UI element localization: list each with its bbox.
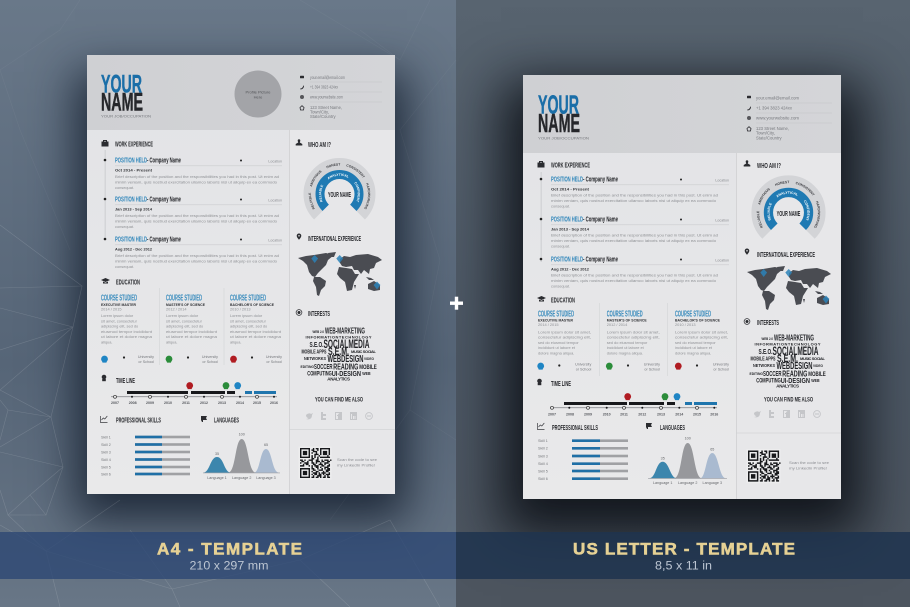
word cloud: WEB: [811, 378, 820, 383]
word cloud: NETWORKS: [753, 363, 775, 368]
section: time line: [102, 375, 278, 405]
course 1: Lorem ipsum dolor sit amet,: [538, 329, 591, 334]
course 1: eiusmod tempor incididunt: [101, 329, 153, 334]
section: time line: 2015: [253, 401, 261, 405]
section: time line: 2016: [270, 401, 278, 405]
header: name: [538, 90, 589, 140]
course 2: University: [202, 355, 218, 359]
panel: US letter resume page: [523, 75, 841, 499]
course 3: 2010 / 2013: [675, 322, 696, 327]
course 2: [606, 309, 660, 372]
course 2: adipiscing elit, sed do: [166, 324, 203, 329]
job entry 2: consequat.: [551, 244, 570, 248]
section: time line: 2011: [182, 401, 190, 405]
course 1: aliqua.: [101, 340, 112, 344]
scan caption: [789, 460, 829, 470]
social links: [306, 396, 372, 420]
job entry 1: - Company Name: [583, 174, 618, 184]
course 3: sit amet, consectetur: [230, 318, 267, 323]
scan caption: my LinkedIn Profile!: [337, 462, 375, 468]
scan caption: [337, 457, 377, 468]
job entry 1: POSITION HELD: [115, 156, 147, 164]
word cloud: UI-DESIGN: [781, 376, 810, 385]
job entry 2: [115, 194, 282, 229]
word cloud: COMPUTING: [756, 378, 781, 384]
job entry 3: consequat.: [551, 284, 570, 288]
word cloud: S.E.O.: [758, 349, 773, 356]
course 1: dolore magna aliqua.: [538, 350, 574, 355]
social links: [754, 396, 820, 418]
course 2: [166, 294, 218, 364]
course 1: Lorem ipsum dolor: [101, 313, 134, 318]
chart: professional skills: Skill 2: [538, 447, 548, 451]
job entry 3: minim veniam, quis nostrud exercitation ullamco laboris nisi ut aliquip ex ea commodo: [115, 258, 277, 264]
contact details: [747, 96, 832, 140]
arc chart: personality: RELIABLE ANALYTICAL CONFIDENT: [318, 173, 360, 202]
job entry 1: POSITION HELD: [551, 174, 583, 184]
word cloud: MOBILE APPS: [302, 350, 327, 356]
chart: languages: 100: [685, 436, 691, 440]
course 3: [230, 294, 282, 364]
section: interests: INTERESTS: [757, 318, 779, 327]
job entry 2: minim veniam, quis nostrud exercitation ullamco laboris nisi ut aliquip ex ea commodo: [551, 238, 716, 243]
job entry 2: [551, 214, 729, 248]
course 2: University: [644, 362, 660, 366]
chart: professional skills: [538, 423, 628, 481]
chart: professional skills: Skill 6: [101, 472, 111, 476]
course 2: aliqua.: [166, 340, 177, 344]
section: time line: 2013: [657, 412, 665, 416]
course 2: 2012 / 2014: [166, 306, 187, 312]
word cloud: NETWORKS: [304, 356, 326, 361]
course 2: sit amet, consectetur: [166, 318, 203, 323]
chart: professional skills: PROFESSIONAL SKILLS: [116, 415, 161, 424]
word cloud: INFORMATIONTECHNOLOGY: [306, 334, 372, 340]
section: interests: INTERESTS: [308, 309, 330, 318]
chart: languages: [646, 423, 727, 485]
section: time line: 2008: [566, 412, 574, 416]
header: name: NAME: [101, 88, 143, 116]
course 1: or School: [138, 360, 154, 364]
course 2: dolore magna aliqua.: [607, 350, 643, 355]
job entry 1: Oct 2014 - Present: [115, 168, 153, 172]
job entry 1: consequat.: [551, 204, 570, 208]
section: time line: 2014: [236, 401, 244, 405]
course 3: consectetur adipiscing elit,: [675, 335, 728, 340]
word cloud: WEB-MARKETING: [325, 326, 365, 336]
job entry 3: - Company Name: [583, 254, 618, 264]
job entry 1: Oct 2014 - Present: [551, 188, 590, 192]
word cloud: S.E.M.: [328, 346, 349, 358]
chart: languages: Language 1: [653, 481, 672, 485]
course 3: ut labore et dolore magna: [230, 334, 282, 339]
section: time line: 2009: [146, 401, 154, 405]
course 1: University: [138, 355, 154, 359]
section: time line: 2010: [603, 412, 611, 416]
plus sign: [450, 297, 463, 310]
word cloud: VIDEO: [813, 363, 823, 368]
section: who am I: WHO AM I?: [757, 161, 781, 170]
course 2: or School: [644, 367, 660, 371]
job entry 2: consequat.: [115, 224, 134, 229]
course 1: incididunt ut labore et: [538, 345, 576, 350]
section: work experience: WORK EXPERIENCE: [115, 139, 153, 148]
section: education: EDUCATION: [551, 295, 575, 304]
profile picture: Profile Picture: [246, 90, 271, 94]
job entry 1: consequat.: [115, 185, 134, 190]
word cloud: MOBILE APPS: [750, 356, 776, 362]
arc chart: personality: RELIABLE AMBITIOUS HONEST CONSISTENT HARDWORKING: [308, 163, 370, 210]
section: time line: 2015: [693, 412, 701, 416]
word cloud: VIDEO: [364, 356, 374, 361]
job entry 2: - Company Name: [147, 194, 181, 204]
job entry 3: [551, 254, 729, 288]
section: work experience: WORK EXPERIENCE: [551, 160, 590, 169]
job entry 2: Jan 2013 - Sep 2014: [115, 208, 153, 212]
chart: professional skills: Skill 1: [538, 439, 548, 443]
word cloud: ANALYTICS: [327, 376, 350, 382]
job entry 3: Aug 2012 - Dec 2012: [551, 268, 589, 272]
job entry 2: POSITION HELD: [551, 214, 583, 224]
word cloud: EDITING: [300, 364, 314, 369]
section: time line: 2012: [638, 412, 646, 416]
contact details: Town/City,: [756, 130, 775, 136]
job entry 2: - Company Name: [583, 214, 618, 224]
course 2: COURSE STUDIED: [607, 309, 643, 318]
course 1: [537, 309, 591, 372]
header: name: YOUR JOB/OCCUPATION: [538, 135, 589, 140]
chart: languages: 100: [239, 432, 245, 436]
course 3: Lorem ipsum dolor sit amet,: [675, 329, 728, 334]
chart: languages: 35: [215, 452, 219, 456]
course 2: or School: [202, 360, 218, 364]
section: interests: [296, 309, 377, 382]
section: international experience: INTERNATIONAL EXPERIENCE: [308, 234, 361, 243]
word cloud: [300, 326, 377, 382]
job entry 3: Location: [715, 258, 729, 262]
contact details: 123 Street Name,: [756, 126, 789, 131]
word cloud: WEB: [362, 371, 371, 376]
chart: languages: Language 1: [207, 476, 227, 480]
caption band: A4: [0, 532, 456, 579]
contact details: [300, 75, 382, 119]
job entry 1: minim veniam, quis nostrud exercitation ullamco laboris nisi ut aliquip ex ea commodo: [551, 198, 716, 203]
section: time line: 2008: [129, 401, 137, 405]
header: name: YOUR: [538, 90, 579, 120]
word cloud: READING: [782, 368, 808, 378]
word cloud: SOCCER: [314, 364, 332, 371]
job entry 2: minim veniam, quis nostrud exercitation ullamco laboris nisi ut aliquip ex ea commodo: [115, 218, 277, 224]
social links: YOU CAN FIND ME ALSO: [315, 396, 363, 404]
job entry 3: minim veniam, quis nostrud exercitation ullamco laboris nisi ut aliquip ex ea commodo: [551, 278, 716, 283]
course 2: sed do eiusmod tempor: [607, 340, 648, 345]
word cloud: EDITING: [750, 371, 763, 376]
contact details: 123 Street Name,: [310, 105, 342, 110]
chart: languages: 65: [710, 448, 714, 452]
word cloud: WEB 2.0: [762, 336, 774, 341]
course 1: COURSE STUDIED: [538, 309, 574, 318]
header: name: [101, 70, 151, 118]
caption band: US letter: US LETTER - TEMPLATE: [573, 540, 795, 558]
chart: professional skills: Skill 5: [538, 469, 548, 473]
caption band: US letter: [456, 532, 910, 579]
section: time line: 2007: [111, 401, 119, 405]
arc chart: personality: RELIABLE AMBITIOUS HONEST CONSISTENT HARDWORKING: [756, 180, 820, 228]
course 1: EXECUTIVE MASTER: [101, 303, 136, 307]
course 1: or School: [576, 367, 591, 371]
section: time line: 2007: [548, 412, 556, 416]
course 1: sed do eiusmod tempor: [538, 340, 579, 345]
word cloud: SOCIALMEDIA: [324, 337, 370, 351]
section: international experience: [297, 234, 382, 296]
chart: languages: 35: [661, 456, 665, 460]
section: time line: 2012: [200, 401, 208, 405]
word cloud: MUSIC SOCIAL: [351, 349, 377, 354]
caption band: US letter: 8,5 x 11 in: [655, 560, 712, 572]
word cloud: WEBDESIGN: [328, 354, 364, 365]
contact details: State/Country: [756, 136, 783, 140]
course 1: sit amet, consectetur: [101, 318, 138, 323]
job entry 2: Brief description of the position and the responsibilities you had in this post. Ut enim ad: [551, 232, 718, 238]
contact details: +1 394 3823 424xx: [756, 106, 793, 110]
arc chart: personality: [752, 176, 826, 238]
word cloud: MOBILE: [359, 364, 377, 371]
contact details: your.email@email.com: [756, 96, 800, 100]
course 3: BACHELOR'S OF SCIENCE: [675, 319, 720, 323]
QR code: [299, 447, 331, 479]
word cloud: WEBDESIGN: [776, 361, 812, 372]
course 2: eiusmod tempor incididunt: [166, 329, 218, 334]
course 1: 2014 / 2015: [101, 306, 122, 312]
profile picture: Here: [254, 94, 263, 100]
caption band: A4: A4 - TEMPLATE: [157, 540, 302, 558]
course 3: Lorem ipsum dolor: [230, 313, 263, 318]
job entry 2: Location: [715, 218, 729, 222]
arc chart: personality: RELIABLE ANALYTICAL CONFIDENT: [767, 191, 810, 221]
job entry 1: [115, 156, 282, 190]
chart: professional skills: Skill 1: [101, 435, 111, 439]
job entry 1: Brief description of the position and the responsibilities you had in this post. Ut enim ad: [551, 192, 718, 198]
section: international experience: INTERNATIONAL EXPERIENCE: [757, 250, 815, 259]
course 3: University: [266, 355, 282, 359]
course 3: University: [713, 362, 729, 366]
panel: A4 resume page: [87, 55, 395, 494]
course 1: EXECUTIVE MASTER: [538, 319, 573, 323]
chart: professional skills: Skill 4: [538, 462, 548, 466]
course 3: adipiscing elit, sed do: [230, 324, 267, 329]
chart: languages: LANGUAGES: [214, 415, 239, 424]
course 2: 2012 / 2014: [607, 322, 628, 327]
job entry 1: - Company Name: [147, 156, 181, 164]
course 2: consectetur adipiscing elit,: [607, 335, 660, 340]
chart: languages: Language 3: [703, 481, 722, 485]
chart: professional skills: Skill 2: [101, 443, 111, 447]
job entry 3: Aug 2012 - Dec 2012: [115, 248, 152, 252]
section: time line: 2014: [675, 412, 683, 416]
section: time line: 2011: [620, 412, 628, 416]
section: interests: [744, 318, 826, 388]
job entry 2: Jan 2013 - Sep 2014: [551, 228, 590, 232]
social links: YOU CAN FIND ME ALSO: [764, 396, 813, 404]
word cloud: S.E.M.: [777, 353, 798, 365]
course 2: ut labore et dolore magna: [166, 334, 218, 339]
section: education: [537, 295, 729, 376]
course 1: adipiscing elit, sed do: [101, 324, 138, 329]
word cloud: MUSIC SOCIAL: [800, 356, 826, 361]
job entry 1: minim veniam, quis nostrud exercitation ullamco laboris nisi ut aliquip ex ea commodo: [115, 180, 277, 184]
word cloud: SOCIALMEDIA: [772, 344, 819, 358]
course 3: incididunt ut labore et: [675, 345, 713, 350]
word cloud: READING: [333, 362, 359, 372]
contact details: +1 394 3823 424xx: [310, 84, 339, 90]
arc chart: personality: YOUR NAME: [328, 192, 351, 199]
job entry 2: Brief description of the position and the responsibilities you had in this post. Ut enim ad: [115, 213, 279, 218]
section: time line: 2009: [584, 412, 592, 416]
course 3: or School: [713, 367, 729, 371]
course 1: 2014 / 2015: [538, 322, 559, 327]
section: who am I: WHO AM I?: [308, 140, 331, 149]
job entry 1: Location: [715, 178, 729, 182]
arc chart: personality: [304, 158, 376, 220]
chart: professional skills: Skill 5: [101, 465, 111, 469]
chart: languages: 65: [264, 443, 268, 447]
course 3: aliqua.: [230, 340, 241, 344]
word cloud: UI-DESIGN: [332, 369, 361, 378]
section: time line: 2016: [710, 412, 718, 416]
contact details: State/Country: [310, 114, 337, 119]
header: name: YOUR JOB/OCCUPATION: [101, 114, 151, 118]
caption band: A4: 210 x 297 mm: [190, 560, 268, 572]
job entry 1: Brief description of the position and the responsibilities you had in this post. Ut enim ad: [115, 174, 279, 179]
job entry 3: - Company Name: [147, 234, 181, 244]
contact details: Town/City,: [310, 110, 329, 114]
scan caption: my LinkedIn Profile!: [789, 466, 827, 470]
scan caption: Scan the code to see: [337, 457, 377, 462]
course 3: COURSE STUDIED: [675, 309, 711, 318]
course 1: consectetur adipiscing elit,: [538, 335, 591, 340]
header: name: NAME: [538, 108, 580, 138]
arc chart: personality: YOUR NAME: [777, 209, 800, 218]
chart: professional skills: Skill 6: [538, 477, 548, 481]
course 1: COURSE STUDIED: [101, 294, 137, 302]
course 2: MASTER'S OF SCIENCE: [166, 303, 205, 307]
job entry 3: consequat.: [115, 264, 134, 269]
chart: professional skills: [100, 415, 190, 476]
background: US letter side with page shadow: [456, 0, 910, 607]
background: A4 side with page shadow: [0, 0, 456, 607]
course 3: BACHELOR'S OF SCIENCE: [230, 303, 274, 307]
section: work experience: [538, 160, 729, 288]
word cloud: S.E.O.: [310, 342, 324, 349]
job entry 3: Brief description of the position and the responsibilities you had in this post. Ut enim ad: [551, 272, 718, 278]
contact details: www.yourwebsite.com: [310, 94, 343, 100]
section: work experience: [102, 139, 282, 269]
course 3: dolore magna aliqua.: [675, 350, 711, 355]
word cloud: INFORMATIONTECHNOLOGY: [754, 342, 821, 346]
section: international experience: [745, 248, 831, 310]
chart: languages: [201, 415, 280, 480]
job entry 2: Location: [268, 198, 282, 202]
job entry 3: [115, 234, 282, 269]
course 1: University: [575, 362, 591, 366]
course 1: [101, 294, 154, 364]
course 3: [675, 309, 729, 372]
course 3: sed do eiusmod tempor: [675, 340, 716, 345]
course 2: Lorem ipsum dolor: [166, 313, 199, 318]
section: who am I: [296, 139, 376, 220]
job entry 3: Brief description of the position and the responsibilities you had in this post. Ut enim ad: [115, 253, 279, 258]
word cloud: WEB-MARKETING: [774, 334, 814, 342]
section: time line: 2010: [164, 401, 172, 405]
chart: languages: Language 3: [256, 476, 276, 480]
chart: languages: Language 2: [232, 476, 251, 480]
course 2: MASTER'S OF SCIENCE: [607, 319, 647, 323]
course 3: COURSE STUDIED: [230, 294, 266, 302]
job entry 3: POSITION HELD: [115, 234, 147, 244]
job entry 1: [551, 174, 729, 208]
chart: languages: Language 2: [678, 481, 697, 485]
word cloud: WEB 2.0: [312, 329, 325, 334]
chart: languages: LANGUAGES: [660, 423, 685, 432]
world map: [298, 252, 382, 296]
course 2: COURSE STUDIED: [166, 294, 202, 302]
section: time line: 2013: [218, 401, 226, 405]
scan caption: Scan the code to see: [789, 460, 829, 465]
course 2: Lorem ipsum dolor sit amet,: [607, 329, 660, 334]
section: education: EDUCATION: [116, 277, 140, 286]
course 3: eiusmod tempor incididunt: [230, 329, 282, 334]
word cloud: [750, 334, 826, 388]
job entry 2: POSITION HELD: [115, 194, 147, 204]
chart: professional skills: PROFESSIONAL SKILLS: [552, 423, 598, 432]
contact details: your.email@email.com: [310, 75, 345, 80]
word cloud: MOBILE: [808, 371, 826, 378]
section: time line: [537, 379, 718, 416]
job entry 3: POSITION HELD: [551, 254, 583, 264]
job entry 1: Location: [268, 160, 282, 164]
course 1: ut labore et dolore magna: [101, 334, 153, 339]
section: who am I: [744, 160, 826, 238]
profile picture: [234, 70, 282, 118]
word cloud: ANALYTICS: [776, 384, 799, 388]
course 3: or School: [266, 360, 282, 364]
job entry 3: Location: [268, 238, 282, 242]
word cloud: SOCCER: [763, 371, 782, 378]
contact details: www.yourwebsite.com: [756, 116, 800, 120]
course 2: incididunt ut labore et: [607, 345, 645, 350]
chart: professional skills: Skill 4: [101, 458, 111, 462]
chart: professional skills: Skill 3: [538, 454, 548, 458]
world map: [747, 266, 831, 310]
chart: professional skills: Skill 3: [101, 450, 111, 454]
section: time line: TIME LINE: [116, 376, 135, 385]
QR code: [747, 449, 781, 483]
header: name: YOUR: [101, 70, 142, 98]
word cloud: COMPUTING: [307, 370, 332, 378]
section: education: [101, 277, 282, 365]
section: time line: TIME LINE: [551, 379, 571, 388]
course 3: 2010 / 2013: [230, 306, 251, 312]
